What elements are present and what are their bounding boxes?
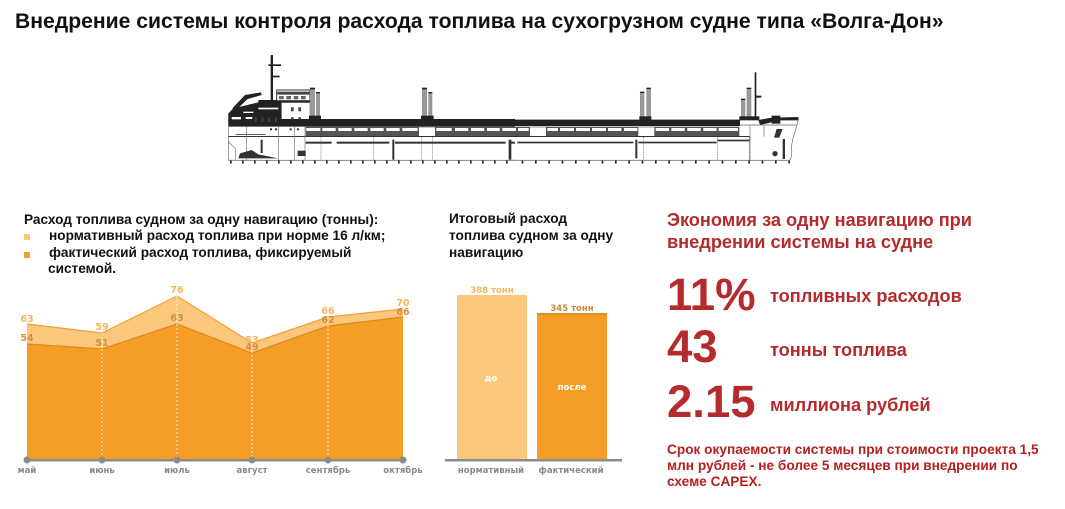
bar chart: total consumption before and after: нормативный [458,466,524,476]
area chart: monthly fuel consumption: октябрь [383,465,423,476]
stat: 2.15 million rubles: 2.15 [667,376,756,427]
area chart: monthly fuel consumption: 66 [396,307,410,318]
heading: savings per navigation: внедрении системы на судне [667,232,933,252]
area chart: monthly fuel consumption: 59 [95,322,109,333]
legend text: fuel consumption per navigation: нормативный расход топлива при норме 16 л/км; [49,228,385,243]
legend text: fuel consumption per navigation [24,212,385,276]
bar chart: total consumption before and after: до [485,374,498,384]
area chart: monthly fuel consumption: июнь [89,466,115,476]
heading: total fuel consumption: навигацию [449,245,523,260]
stat: 11 percent: 11% [667,269,756,320]
stat: 43 tonnes [667,321,907,372]
illustration: ship side view [228,55,799,164]
area chart: monthly fuel consumption: 53 [245,335,259,346]
heading: total fuel consumption: Итоговый расход [449,211,567,226]
payback note: млн рублей - не более 5 месяцев при внедрении по [667,458,1018,473]
area chart: monthly fuel consumption: 76 [170,285,184,296]
stat: 2.15 million rubles: миллиона рублей [770,395,931,415]
area chart: monthly fuel consumption: август [236,466,268,476]
area chart: monthly fuel consumption: 70 [396,298,410,309]
heading: savings per navigation: Экономия за одну навигацию при [667,210,972,230]
payback note [667,442,1039,489]
heading: total fuel consumption: топлива судном за одну [449,228,613,243]
stat: 11 percent: топливных расходов [770,286,962,306]
area chart: monthly fuel consumption: 66 [321,306,335,317]
area chart: monthly fuel consumption: 49 [245,342,259,353]
area chart: monthly fuel consumption: 62 [321,315,335,326]
bar chart: total consumption before and after: фактический [538,466,604,476]
bar chart: total consumption before and after: после [558,383,587,393]
area chart: monthly fuel consumption: 63 [20,314,34,325]
payback note: Срок окупаемости системы при стоимости проекта 1,5 [667,442,1039,457]
stat: 2.15 million rubles [667,376,931,427]
area chart: monthly fuel consumption: 63 [170,313,184,324]
heading: total fuel consumption [449,211,613,260]
payback note: схеме CAPEX. [667,474,761,489]
heading: savings per navigation [667,210,972,252]
legend text: fuel consumption per navigation: фактический расход топлива, фиксируемый [49,245,351,260]
title: Внедрение системы контроля расхода топлива на сухогрузном судне типа «Волга-Дон» [15,10,943,33]
area chart: monthly fuel consumption: сентябрь [306,465,350,476]
bar chart: total consumption before and after: 345 тонн [550,304,594,314]
area chart: monthly fuel consumption: 54 [20,333,34,344]
area chart: monthly fuel consumption: июль [164,466,190,476]
legend text: fuel consumption per navigation: системой. [48,261,116,276]
stat: 11 percent [667,269,962,320]
stat: 43 tonnes: тонны топлива [770,340,907,360]
bar chart: total consumption before and after [445,286,622,476]
area chart: monthly fuel consumption: 51 [95,338,109,349]
legend text: fuel consumption per navigation: Расход топлива судном за одну навигацию (тонны): [24,212,378,227]
bar chart: total consumption before and after: 388 тонн [470,286,514,296]
area chart: monthly fuel consumption [18,285,423,476]
area chart: monthly fuel consumption: май [18,466,36,476]
stat: 43 tonnes: 43 [667,321,718,372]
